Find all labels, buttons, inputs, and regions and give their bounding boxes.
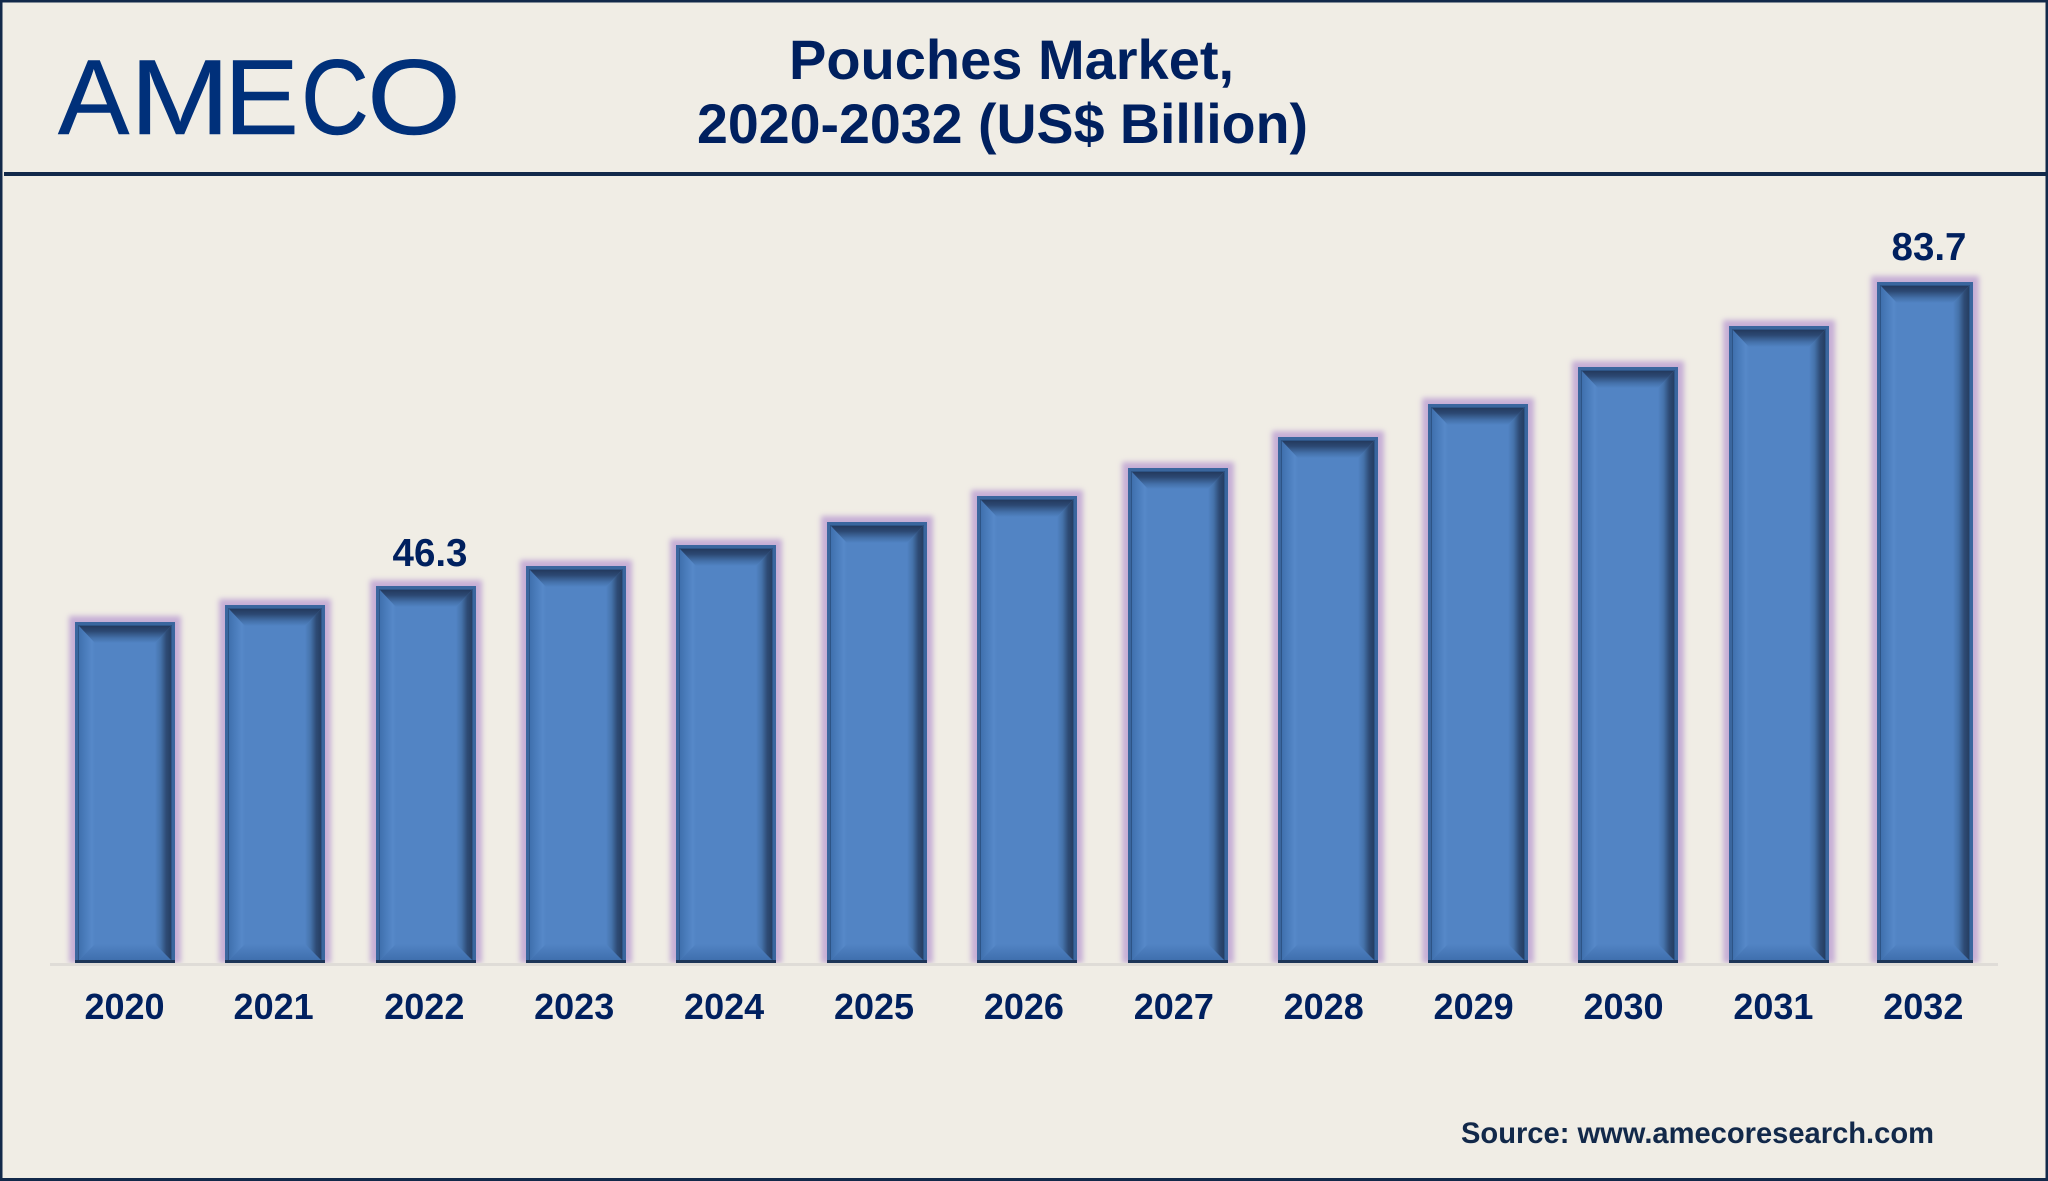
bar: 2031	[1723, 320, 1835, 963]
value label: 2022: 46.3	[393, 532, 467, 575]
title	[697, 28, 1308, 155]
bar: 2023	[520, 560, 632, 963]
x axis labels: 2025	[834, 986, 914, 1027]
x axis labels: 2029	[1434, 986, 1514, 1027]
logo: AMECO: E	[224, 38, 299, 157]
logo: AMECO: C	[301, 38, 369, 157]
x axis labels: 2030	[1583, 986, 1664, 1027]
bar: 2028	[1272, 431, 1384, 963]
x axis labels: 2031	[1733, 986, 1813, 1027]
bar: 2029	[1422, 398, 1534, 963]
bar: 2032	[1871, 276, 1979, 963]
bar: 2026	[971, 490, 1083, 963]
header divider	[4, 172, 2048, 176]
bar chart	[69, 276, 1979, 963]
logo: AMECO: A	[58, 37, 130, 157]
x axis labels: 2021	[234, 986, 314, 1027]
x axis labels: 2028	[1284, 986, 1364, 1027]
bar: 2030	[1572, 361, 1684, 963]
bar: 2027	[1122, 462, 1234, 963]
x axis labels: 2032	[1883, 986, 1963, 1027]
logo: AMECO: O	[367, 38, 461, 157]
logo: AMECO	[58, 37, 461, 158]
bar: 2025	[821, 516, 933, 963]
x axis labels: 2022	[384, 986, 464, 1027]
bar: 2020	[69, 616, 181, 963]
bar: 2022	[370, 580, 482, 963]
x axis labels: 2027	[1134, 986, 1214, 1027]
x axis labels: 2020	[84, 986, 165, 1027]
title: 2020-2032 (US$ Billion)	[697, 92, 1308, 155]
x axis labels: 2026	[984, 986, 1064, 1027]
bar: 2024	[670, 539, 782, 963]
x axis labels	[84, 986, 1963, 1027]
logo: AMECO: M	[130, 38, 230, 158]
value label: 2032: 83.7	[1892, 226, 1966, 269]
title: Pouches Market,	[789, 28, 1234, 91]
x axis labels: 2023	[534, 986, 614, 1027]
bar: 2021	[219, 599, 331, 963]
x axis labels: 2024	[684, 986, 764, 1027]
source note: Source: www.amecoresearch.com	[1461, 1117, 1934, 1150]
